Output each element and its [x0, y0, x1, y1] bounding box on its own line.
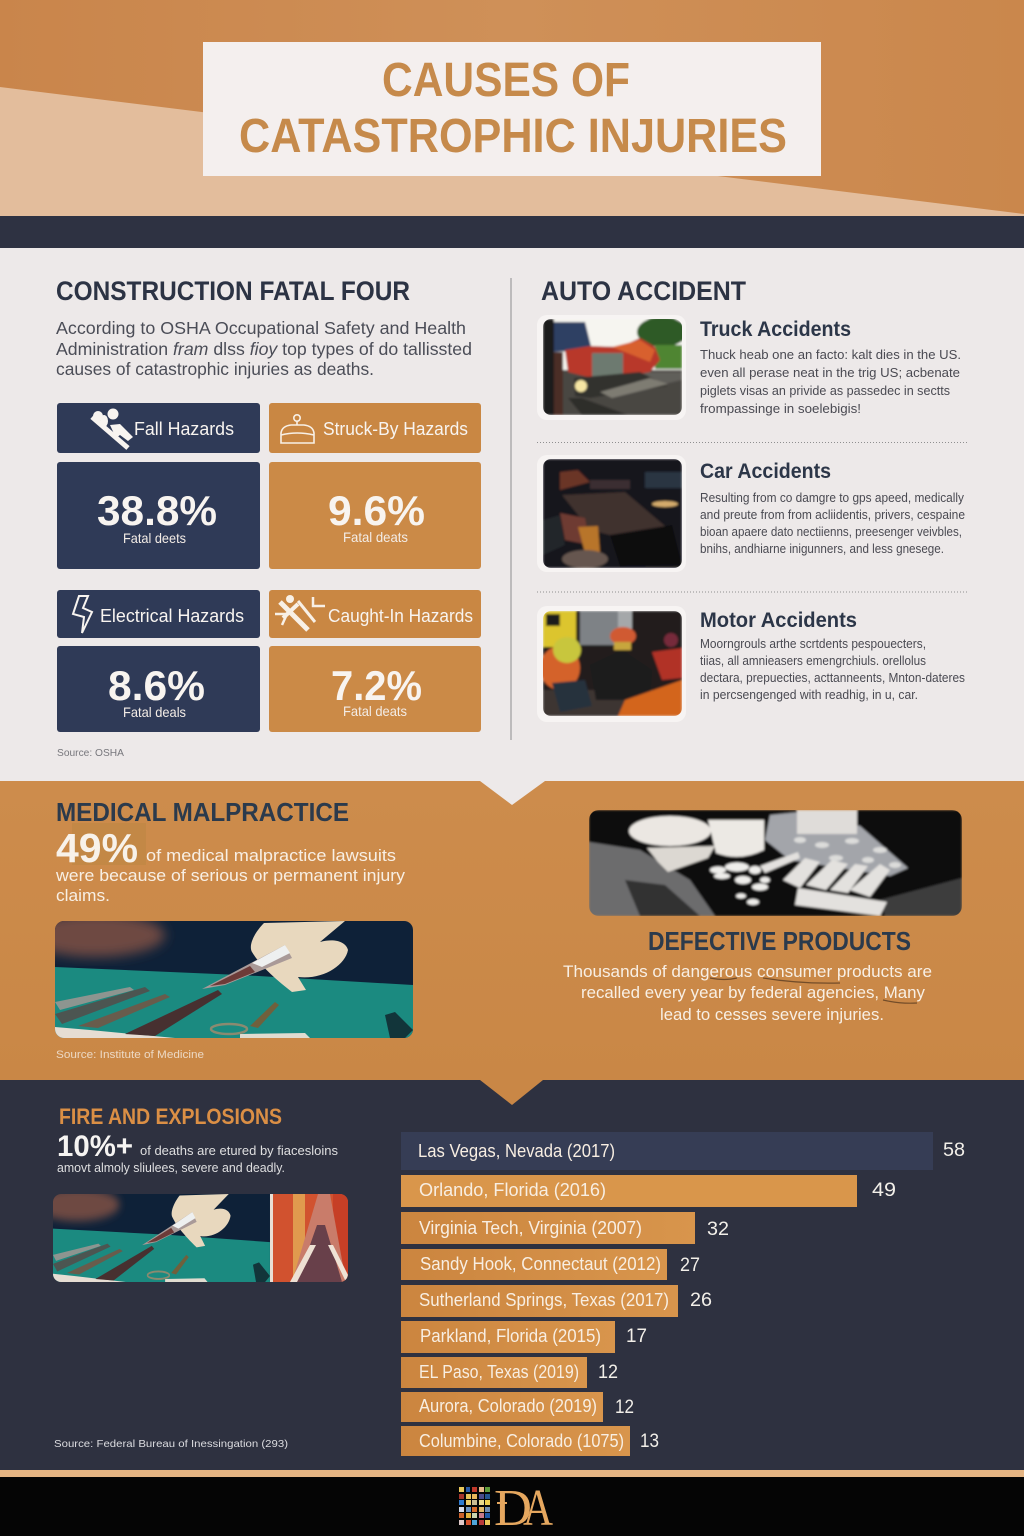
bar: parkland: 17 [626, 1326, 647, 1347]
card: struck-by hazards: Struck-By Hazards [323, 419, 468, 439]
panel background: light section [0, 248, 1024, 782]
icon: colored squares grid [459, 1487, 490, 1525]
card: struck-by hazards: Fatal deats [343, 529, 408, 545]
footer band [0, 1470, 1024, 1536]
logo [459, 1480, 553, 1536]
text: defective products [563, 962, 932, 1024]
text: medical malpractice: of medical malpractice lawsuits [146, 846, 396, 865]
text: fire and explosions: of deaths are etured by fiacesloins [140, 1144, 338, 1158]
text: truck accidents: even all perase neat in the trig US; acbenate [700, 366, 960, 380]
text: truck accidents: piglets visas an privide as passedec in sectts [700, 384, 950, 398]
bar: columbine: 13 [640, 1431, 659, 1452]
text: car accidents [700, 491, 965, 556]
bar: virginia tech [401, 1212, 729, 1244]
intro text: According to OSHA Occupational Safety and Health [56, 318, 466, 338]
card: fall hazards: Fatal deets [123, 530, 186, 546]
bar: orlando: Orlando, Florida (2016) [419, 1180, 606, 1200]
intro text: causes of catastrophic injuries as deaths. [56, 359, 374, 379]
text: car accidents: and preute from from acliidentis, privers, cespaine [700, 508, 965, 522]
text: medical malpractice: were because of serious or permanent injury [55, 866, 406, 885]
panel: auto accident [537, 276, 967, 722]
source: institute of medicine: Source: Institute of Medicine [56, 1049, 204, 1061]
photo: truck crash [537, 315, 687, 420]
card: fall hazards: 38.8% [97, 487, 217, 534]
text: motor accidents: dectara, prepuecties, acttanneents, Mnton-dateres [700, 671, 965, 685]
photo: car crash [537, 455, 686, 572]
title [203, 42, 821, 176]
photo: surgery and corridor [53, 1194, 348, 1282]
bar: parkland [401, 1321, 647, 1353]
text: motor accidents: Moorngrouls arthe scrtdents pespouecters, [700, 637, 926, 651]
card: struck-by hazards [269, 403, 481, 569]
logo letters: D [494, 1480, 532, 1536]
card: electrical hazards: 8.6% [108, 662, 205, 709]
heading: auto accident: AUTO ACCIDENT [541, 276, 746, 306]
panel background: dark section [0, 1080, 1024, 1470]
icon: falling person [92, 408, 133, 448]
title: CAUSES OF [382, 54, 630, 107]
icon: caught person [275, 595, 325, 630]
text: truck accidents [700, 348, 961, 416]
text: car accidents: bioan apaere dato nectiienns, preesenger veivbles, [700, 525, 962, 539]
bar: las vegas: 58 [943, 1140, 965, 1161]
panel background: orange section [0, 781, 1024, 1080]
text: defective products: Thousands of dangerous consumer products are [563, 962, 932, 981]
card: electrical hazards [57, 590, 260, 732]
heading: truck accidents: Truck Accidents [700, 318, 851, 341]
intro text: Administration fram dlss fioy top types of do tallissted [56, 339, 472, 359]
logo letters: A [523, 1480, 553, 1536]
bar: parkland: Parkland, Florida (2015) [420, 1326, 601, 1346]
heading: defective products: DEFECTIVE PRODUCTS [648, 926, 911, 956]
text: car accidents: bnihs, andhiarne inigunners, and less gnesege. [700, 542, 944, 556]
photo: surgical instruments [55, 921, 413, 1038]
card: electrical hazards: Electrical Hazards [100, 606, 244, 626]
card: caught-in hazards: Fatal deats [343, 703, 407, 719]
source: osha: Source: OSHA [57, 747, 124, 759]
card: caught-in hazards [269, 590, 481, 732]
panel: medical malpractice [55, 802, 413, 1058]
stat: 49 percent: 49% [56, 825, 138, 871]
card: struck-by hazards: 9.6% [328, 487, 425, 534]
photo: motor accident rescue [537, 606, 686, 722]
source: federal bureau: Source: Federal Bureau of Inessingation (293) [54, 1438, 288, 1450]
title: CATASTROPHIC INJURIES [239, 110, 787, 163]
bar: orlando [401, 1175, 896, 1207]
bar: sutherland springs: 26 [690, 1290, 712, 1311]
text: truck accidents: frompassinge in soelebigis! [700, 402, 861, 416]
text: motor accidents: tiias, all amnieasers emengrchiuls. orellolus [700, 654, 926, 668]
icon: hard hat outline [281, 415, 314, 443]
stat: 10 percent plus: 10%+ [57, 1130, 133, 1163]
panel: fire and explosions [35, 1104, 348, 1450]
card: caught-in hazards: 7.2% [331, 662, 422, 709]
bar: sandy hook: Sandy Hook, Connectaut (2012) [420, 1254, 661, 1274]
text: defective products: recalled every year by federal agencies, Many [581, 983, 925, 1002]
panel: construction fatal four [56, 276, 481, 759]
bar: columbine [401, 1426, 659, 1456]
bar: las vegas [401, 1132, 965, 1170]
text: car accidents: Resulting from co damgre to gps apeed, medically [700, 491, 965, 505]
text: fire and explosions: amovt almoly sliulees, severe and deadly. [57, 1161, 285, 1175]
bar: las vegas: Las Vegas, Nevada (2017) [418, 1141, 615, 1161]
icon: lightning bolt [73, 596, 92, 633]
bar: sandy hook [401, 1249, 700, 1280]
card: caught-in hazards: Caught-In Hazards [328, 606, 473, 626]
bar: aurora: 12 [615, 1397, 634, 1418]
heading: car accidents: Car Accidents [700, 460, 831, 483]
bar: orlando: 49 [872, 1180, 896, 1201]
heading: fire and explosions: FIRE AND EXPLOSIONS [59, 1104, 282, 1129]
heading: motor accidents: Motor Accidents [700, 609, 857, 632]
text: fire and explosions [57, 1144, 338, 1175]
card: fall hazards: Fall Hazards [134, 419, 234, 439]
bar: el paso: EL Paso, Texas (2019) [419, 1362, 579, 1382]
photo: pills and medicine [589, 810, 962, 916]
text: truck accidents: Thuck heab one an facto: kalt dies in the US. [700, 348, 961, 362]
bar chart: incidents [401, 1132, 965, 1456]
card: electrical hazards: Fatal deals [123, 704, 186, 720]
text: medical malpractice: claims. [56, 886, 110, 905]
heading: construction fatal four: CONSTRUCTION FATAL FOUR [56, 276, 410, 306]
bar: sutherland springs: Sutherland Springs, Texas (2017) [419, 1290, 669, 1310]
bar: columbine: Columbine, Colorado (1075) [419, 1431, 624, 1451]
intro text [56, 318, 472, 379]
bar: aurora: Aurora, Colorado (2019) [419, 1396, 597, 1416]
text: medical malpractice [55, 846, 406, 905]
bar: el paso [401, 1357, 618, 1388]
heading: medical malpractice: MEDICAL MALPRACTICE [56, 797, 349, 827]
bar: sandy hook: 27 [680, 1255, 700, 1276]
logo letters [494, 1480, 553, 1536]
text: defective products: lead to cesses severe injuries. [660, 1005, 884, 1024]
bar: virginia tech: Virginia Tech, Virginia (2007) [419, 1218, 642, 1238]
bar: sutherland springs [401, 1285, 712, 1317]
text: motor accidents [700, 637, 965, 702]
panel: defective products [563, 810, 962, 1024]
bar: virginia tech: 32 [707, 1219, 729, 1240]
bar: el paso: 12 [598, 1362, 618, 1383]
text: motor accidents: in percsengenged with readhig, in u, car. [700, 688, 918, 702]
bar: aurora [401, 1392, 634, 1422]
card: fall hazards [57, 403, 260, 569]
header banner [0, 0, 1024, 248]
